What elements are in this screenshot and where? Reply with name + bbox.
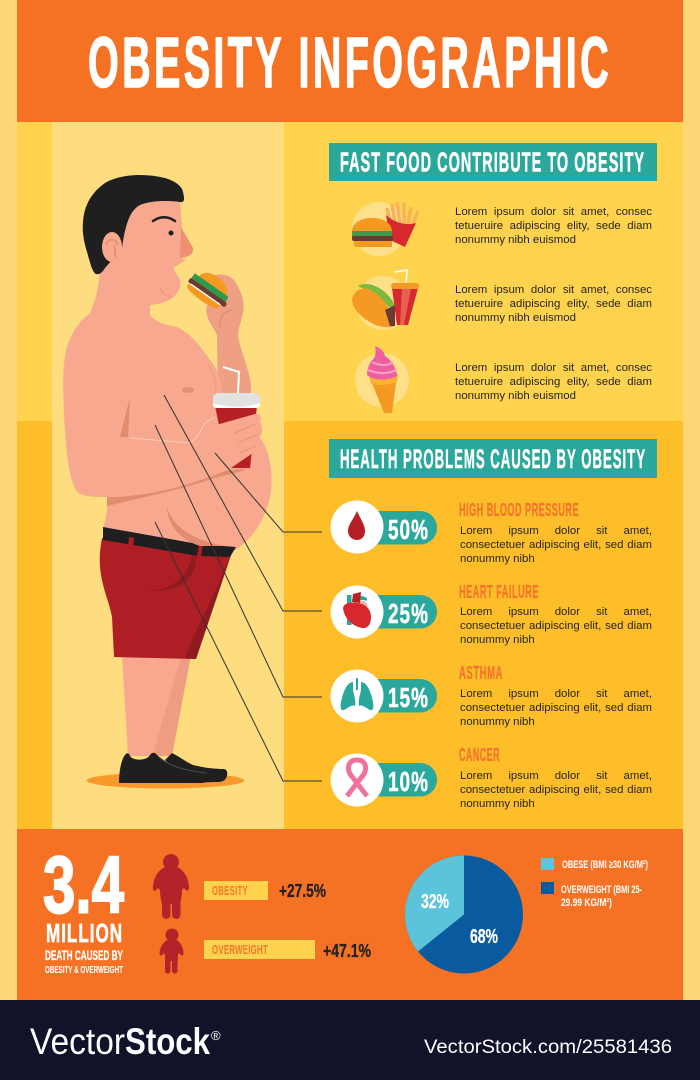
stat: heart failure: 25%	[388, 598, 429, 629]
text: cancer	[460, 770, 652, 810]
bar: obesity: OBESITY	[212, 883, 248, 898]
text: cancer: consectetuer adipiscing elit, sed diam	[460, 784, 652, 796]
watermark logo	[30, 1021, 221, 1062]
pie chart: 68%	[470, 926, 498, 948]
text: high blood pressure: nonummy nibh	[460, 553, 535, 565]
condition headings: HIGH BLOOD PRESSURE	[459, 500, 579, 520]
text: cancer: nonummy nibh	[460, 798, 535, 810]
belt	[103, 527, 236, 557]
text: taco and drink: Lorem ipsum dolor sit amet, consec	[455, 284, 652, 296]
text: heart failure: nonummy nibh	[460, 634, 535, 646]
stat: cancer	[330, 754, 437, 806]
text: ice cream: Lorem ipsum dolor sit amet, consec	[455, 362, 652, 374]
finger creases	[235, 423, 258, 453]
hand over cup	[190, 414, 262, 478]
text: asthma: nonummy nibh	[460, 716, 535, 728]
arm holding burger	[206, 274, 251, 397]
text: high blood pressure: Lorem ipsum dolor sit amet,	[460, 525, 652, 537]
text: ice cream	[455, 362, 652, 402]
ear	[102, 232, 122, 262]
shoes	[119, 753, 227, 783]
headline number: MILLION	[46, 918, 123, 948]
text: burger and fries: tetueruire adipiscing elity, sede diam	[455, 220, 652, 232]
headline number	[43, 840, 124, 976]
legend: 29.99 KG/M²)	[561, 897, 612, 909]
bar: overweight: +47.1%	[323, 941, 371, 961]
nose	[180, 227, 193, 258]
heading: health problems	[329, 439, 657, 478]
legend: OBESE (BMI ≥30 KG/M²)	[562, 859, 648, 871]
text: heart failure	[460, 606, 652, 646]
hair	[83, 175, 184, 274]
legend: OVERWEIGHT (BMI 25-	[561, 884, 642, 896]
stat: high blood pressure: 50%	[388, 514, 429, 545]
pointer lines from body to stats	[155, 395, 322, 781]
watermark logo: ®	[211, 1028, 221, 1043]
icon: obese figure	[153, 854, 189, 919]
chin crease	[160, 286, 172, 297]
illustration: man eating burger	[63, 175, 272, 788]
icon: lungs	[341, 678, 373, 710]
text: taco and drink	[455, 284, 652, 324]
bar: overweight: OVERWEIGHT	[212, 942, 268, 957]
bar: overweight	[204, 940, 371, 961]
bar: obesity: +27.5%	[279, 881, 326, 901]
condition headings: ASTHMA	[459, 663, 503, 683]
arm outline	[130, 417, 215, 443]
text: ice cream: nonummy nibh euismod	[455, 390, 576, 402]
icon: taco and drink	[352, 270, 419, 330]
text: burger and fries: Lorem ipsum dolor sit amet, consec	[455, 206, 652, 218]
condition headings: HEART FAILURE	[459, 582, 539, 602]
pie chart: 32%	[421, 891, 449, 913]
watermark id: VectorStock.com/25581436	[424, 1036, 672, 1058]
text: taco and drink: nonummy nibh euismod	[455, 312, 576, 324]
legend	[541, 858, 648, 909]
text: high blood pressure: consectetuer adipiscing elit, sed diam	[460, 539, 652, 551]
text: asthma: Lorem ipsum dolor sit amet,	[460, 688, 652, 700]
torso and head	[63, 195, 272, 550]
icon: pink ribbon	[347, 760, 367, 796]
bottom statistics panel	[17, 829, 683, 1000]
text: heart failure: consectetuer adipiscing elit, sed diam	[460, 620, 652, 632]
text: burger and fries	[455, 206, 652, 246]
text: high blood pressure	[460, 525, 652, 565]
watermark logo: Stock	[125, 1021, 210, 1062]
text: heart failure: Lorem ipsum dolor sit amet,	[460, 606, 652, 618]
text: taco and drink: tetueruire adipiscing elity, sede diam	[455, 298, 652, 310]
stat: cancer: 10%	[388, 766, 429, 797]
icon: blood drop	[348, 511, 365, 540]
footer bar	[0, 1000, 700, 1080]
legs	[122, 655, 191, 756]
eye and eyebrow	[153, 217, 175, 236]
headline number: DEATH CAUSED BY	[45, 947, 123, 963]
headline number: OBESITY & OVERWEIGHT	[45, 965, 123, 976]
finger lines	[220, 310, 232, 327]
headline number: 3.4	[43, 840, 124, 930]
drink cup	[213, 367, 260, 468]
condition headings	[459, 500, 579, 765]
text: cancer: Lorem ipsum dolor sit amet,	[460, 770, 652, 782]
stat: heart failure	[330, 586, 437, 638]
pie chart	[405, 856, 523, 974]
stat: asthma: 15%	[388, 682, 429, 713]
icon: heart	[343, 592, 371, 628]
stat: high blood pressure	[330, 500, 437, 554]
icon: ice cream	[355, 346, 409, 413]
body shading	[107, 363, 247, 546]
text: asthma	[460, 688, 652, 728]
stat: asthma	[330, 670, 437, 722]
icon: overweight figure	[160, 928, 184, 974]
condition headings: CANCER	[459, 745, 500, 765]
text: burger and fries: nonummy nibh euismod	[455, 234, 576, 246]
icon: burger and fries	[352, 202, 418, 256]
text: ice cream: tetueruire adipiscing elity, sede diam	[455, 376, 652, 388]
header banner	[17, 0, 683, 122]
shorts	[100, 538, 231, 659]
text: asthma: consectetuer adipiscing elit, sed diam	[460, 702, 652, 714]
floor shadow	[86, 772, 244, 788]
bar: obesity	[204, 881, 326, 901]
watermark logo: Vector	[30, 1021, 125, 1062]
burger held	[183, 264, 237, 314]
